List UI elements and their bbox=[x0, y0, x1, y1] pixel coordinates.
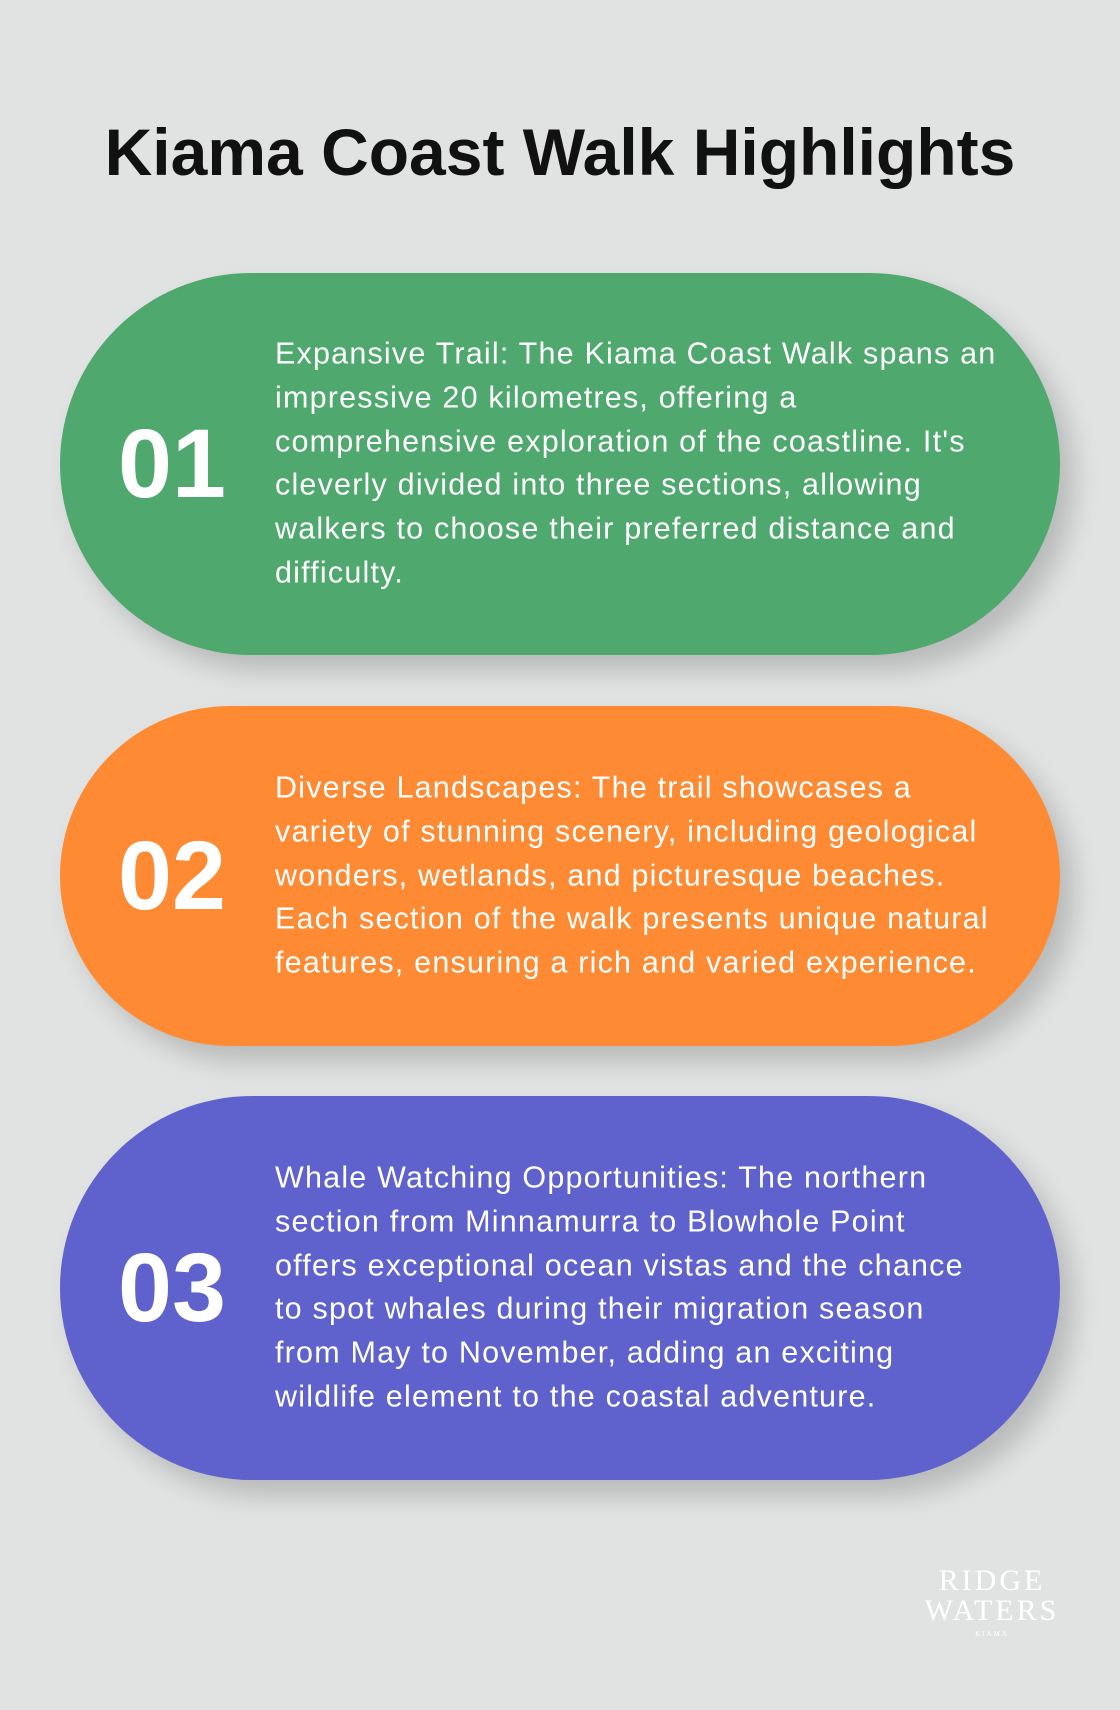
logo: Ridge Waters: WATERS bbox=[925, 1594, 1059, 1627]
text block 02 bbox=[275, 771, 989, 980]
text block 02: wonders, wetlands, and picturesque beaches. bbox=[275, 858, 945, 892]
text block 02: Diverse Landscapes: The trail showcases a bbox=[275, 771, 912, 805]
panel: 02 diverse landscapes bbox=[60, 706, 1060, 1046]
text block 03: from May to November, adding an exciting bbox=[275, 1336, 894, 1370]
text block 03: wildlife element to the coastal adventure. bbox=[275, 1380, 876, 1414]
logo: Ridge Waters: KIAMA bbox=[975, 1630, 1009, 1638]
text block 02: Each section of the walk presents unique natural bbox=[275, 902, 989, 936]
text block 01: impressive 20 kilometres, offering a bbox=[275, 380, 797, 414]
panel: 03 whale watching bbox=[60, 1096, 1060, 1480]
text block 03: to spot whales during their migration season bbox=[275, 1292, 925, 1326]
logo: Ridge Waters: RIDGE bbox=[939, 1564, 1045, 1597]
text block 02: features, ensuring a rich and varied experience. bbox=[275, 946, 977, 980]
text block 03: offers exceptional ocean vistas and the chance bbox=[275, 1248, 964, 1282]
text block 03: section from Minnamurra to Blowhole Point bbox=[275, 1204, 906, 1238]
text block 01: comprehensive exploration of the coastline. It's bbox=[275, 424, 966, 458]
number 03: 03 bbox=[118, 1233, 226, 1342]
text block 01: Expansive Trail: The Kiama Coast Walk spans an bbox=[275, 337, 996, 371]
number 01: 01 bbox=[118, 409, 226, 518]
title: Kiama Coast Walk Highlights bbox=[105, 115, 1015, 189]
text block 03 bbox=[275, 1161, 964, 1414]
number 02: 02 bbox=[118, 821, 226, 930]
logo: Ridge Waters bbox=[924, 1564, 1059, 1638]
text block 03: Whale Watching Opportunities: The northern bbox=[275, 1161, 927, 1195]
text block 01 bbox=[275, 337, 996, 590]
text block 02: variety of stunning scenery, including geological bbox=[275, 814, 978, 848]
text block 01: difficulty. bbox=[275, 556, 404, 590]
panel: 01 expansive trail bbox=[60, 273, 1060, 655]
text block 01: cleverly divided into three sections, allowing bbox=[275, 468, 922, 502]
text block 01: walkers to choose their preferred distance and bbox=[275, 512, 956, 546]
